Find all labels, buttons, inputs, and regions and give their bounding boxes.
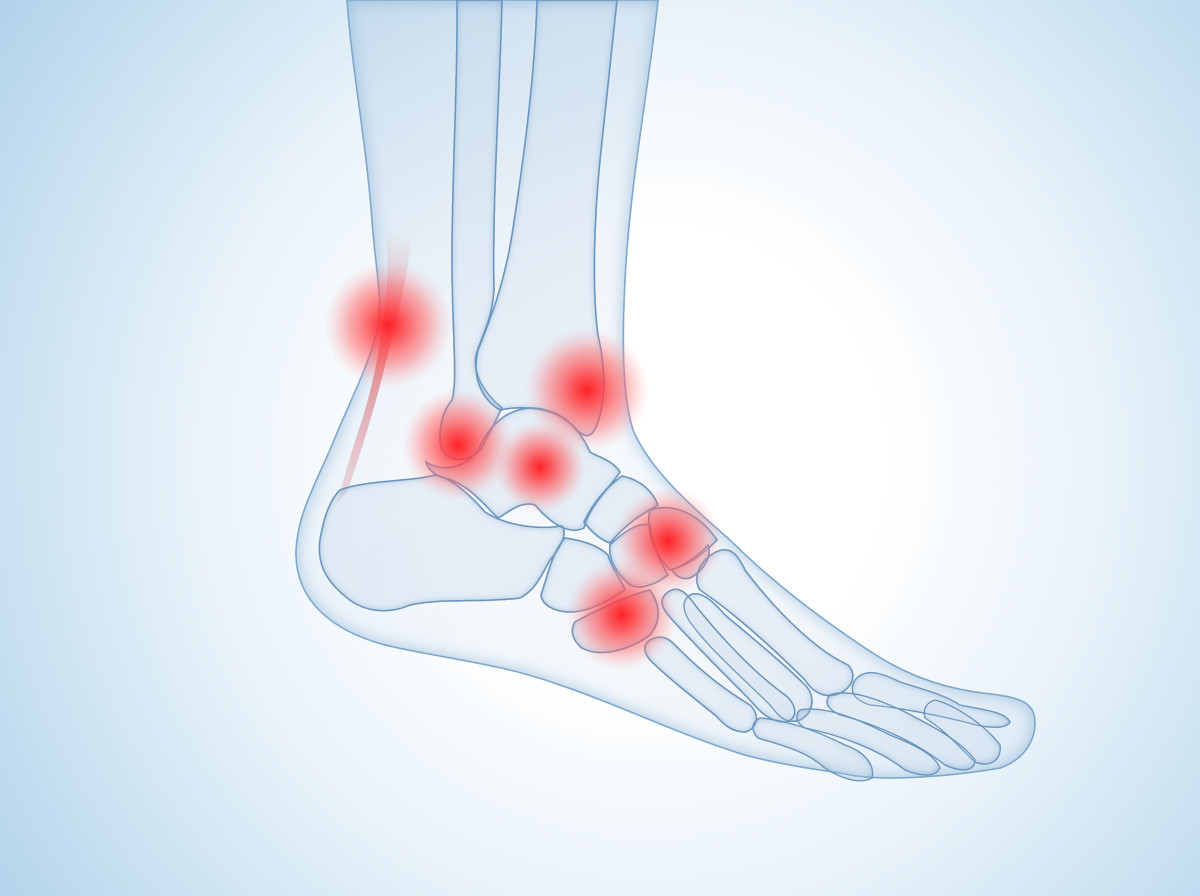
tibia — [476, 0, 617, 436]
achilles tendon — [336, 230, 412, 505]
pain point: front ankle — [525, 328, 649, 452]
fibula — [440, 0, 502, 460]
foot and leg outline — [296, 0, 1035, 778]
pain point: rear ankle — [402, 389, 514, 501]
cuneiforms — [572, 508, 717, 652]
talus — [426, 408, 620, 530]
toe bones — [753, 673, 1010, 781]
pain point: achilles — [324, 261, 452, 389]
metatarsals — [645, 550, 853, 732]
calcaneus — [319, 475, 564, 611]
pain point: cuneiform — [614, 487, 722, 595]
cuboid — [541, 538, 625, 612]
navicular — [584, 476, 658, 543]
pain point: talus — [494, 421, 586, 513]
pain point: midfoot — [566, 559, 678, 671]
